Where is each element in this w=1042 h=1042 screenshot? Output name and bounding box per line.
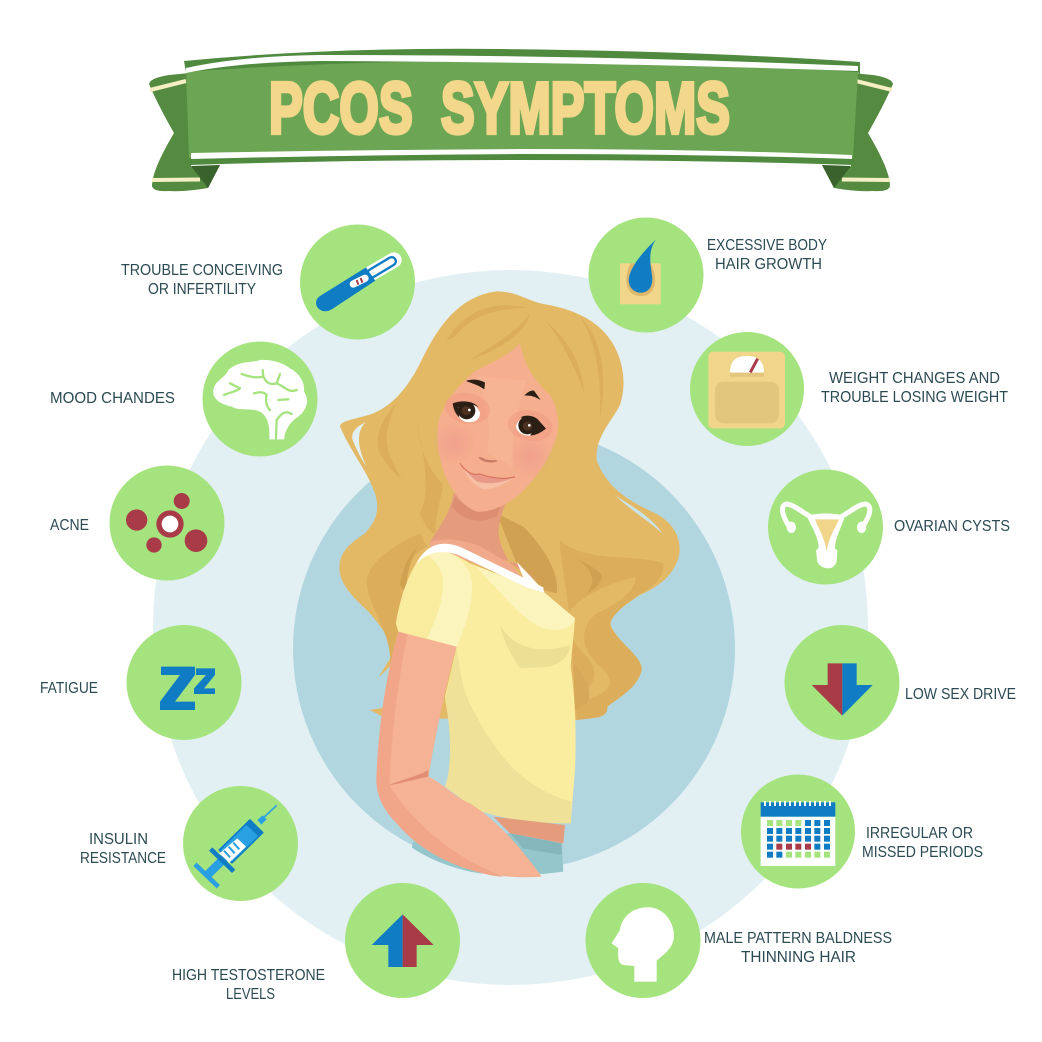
label [704, 930, 892, 966]
icon circle: syringe [183, 786, 298, 901]
label [821, 370, 1008, 406]
icon: bathroom scale [708, 352, 785, 428]
icon: head silhouette [612, 907, 674, 982]
icon circle: pregnancy test [300, 224, 415, 340]
banner main ribbon [184, 49, 860, 165]
shirt [396, 544, 576, 823]
banner left tail [149, 73, 220, 191]
label: LOW SEX DRIVE [905, 686, 1016, 703]
symptom: fatigue [40, 625, 242, 740]
icon circle: down arrow [784, 625, 900, 740]
label: HAIR GROWTH [715, 256, 822, 273]
icon: Zz shapes [160, 667, 215, 710]
eyebrows [466, 380, 485, 389]
label: MISSED PERIODS [862, 844, 983, 861]
icon: syringe [195, 805, 277, 887]
right eye [516, 416, 546, 436]
label [80, 831, 166, 867]
darkest hair shading [400, 513, 602, 710]
jeans [412, 833, 563, 874]
label: ACNE [50, 517, 89, 534]
label: INSULIN [89, 831, 148, 848]
hair strands [367, 305, 663, 720]
icon circle: scale [690, 332, 804, 446]
label: FATIGUE [40, 680, 98, 697]
mouth [460, 463, 515, 489]
icon circle: calendar [741, 774, 855, 888]
label: OVARIAN CYSTS [894, 518, 1010, 535]
symptom: insulin resistance [80, 786, 298, 901]
label: LEVELS [226, 986, 275, 1003]
icon circle: head [586, 883, 700, 998]
icon: calendar [761, 801, 835, 866]
label: OR INFERTILITY [148, 281, 256, 298]
face [437, 343, 558, 512]
icon circle: sleep [126, 625, 242, 740]
symptom: low sex drive [784, 625, 1016, 740]
label: RESISTANCE [80, 850, 166, 867]
background circle: inner blue [293, 428, 735, 870]
neck and chest [430, 493, 538, 582]
woman figure [339, 291, 680, 877]
symptom: weight changes [690, 332, 1008, 446]
label: IRREGULAR OR [866, 825, 973, 842]
symptom: high testosterone [172, 883, 460, 1003]
eye sockets [442, 389, 492, 427]
banner right tail [822, 73, 893, 191]
icon: pregnancy test [316, 260, 394, 311]
lighter hair ribbons [567, 577, 635, 703]
symptom: mood changes [50, 342, 318, 456]
label: MALE PATTERN BALDNESS [704, 930, 892, 947]
label: EXCESSIVE BODY [707, 237, 827, 254]
symptom: excessive hair [588, 218, 827, 332]
icon: brain [213, 360, 307, 439]
icon: up arrow [372, 914, 434, 967]
label [172, 967, 325, 1003]
label: TROUBLE CONCEIVING [121, 262, 283, 279]
icon: down arrow [812, 663, 873, 716]
label [707, 237, 827, 273]
icon circle: uterus [768, 470, 883, 584]
icon circle: up arrow [345, 883, 460, 998]
label: THINNING HAIR [741, 949, 856, 966]
icon: hair follicle [620, 239, 661, 304]
blush [432, 422, 476, 465]
icon circle: acne [110, 466, 224, 580]
label [862, 825, 983, 861]
midriff [493, 817, 565, 843]
label: HIGH TESTOSTERONE [172, 967, 325, 984]
icon: uterus [783, 504, 870, 568]
symptom: irregular periods [741, 774, 983, 888]
left eye [453, 401, 480, 422]
symptom: male pattern baldness [586, 883, 892, 998]
icon circle: brain [202, 342, 318, 456]
label: MOOD CHANDES [50, 390, 175, 407]
label: TROUBLE LOSING WEIGHT [821, 389, 1008, 406]
back hair [339, 291, 680, 720]
icon circle: hair follicle [588, 218, 704, 332]
symptom: acne [50, 466, 224, 580]
symptom: trouble conceiving [121, 224, 415, 340]
hair gaps [352, 422, 367, 467]
banner title text: PCOS SYMPTOMS [269, 69, 730, 149]
title banner [149, 49, 893, 191]
nose [478, 457, 497, 462]
background circle: outer pale blue [153, 270, 868, 985]
label [121, 262, 283, 298]
arm [376, 632, 542, 877]
symptom: ovarian cysts [768, 470, 1010, 584]
icon: acne spots [126, 493, 207, 553]
label: WEIGHT CHANGES AND [829, 370, 1000, 387]
